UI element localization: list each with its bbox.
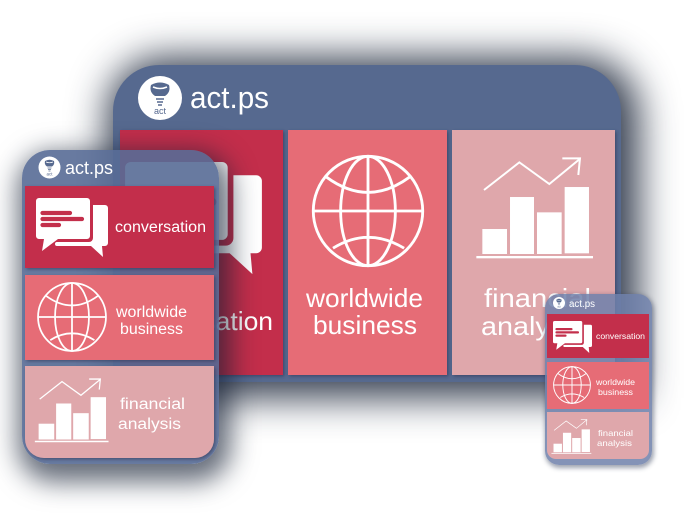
card: financial analysis small — [547, 412, 649, 459]
card: worldwide business small — [547, 362, 649, 409]
logo: large — [138, 76, 269, 120]
card: financial analysis large — [452, 130, 615, 375]
card: worldwide business medium: worldwide — [115, 304, 187, 321]
card: conversation small: conversation — [596, 331, 645, 341]
card: conversation large — [120, 130, 283, 375]
card: financial analysis medium: analysis — [118, 416, 181, 433]
card: conversation medium: conversation — [115, 219, 206, 236]
card: worldwide business large: business — [313, 310, 417, 340]
panel: small phone screen — [545, 294, 652, 465]
logo: small — [553, 297, 595, 310]
card: financial analysis small: financial — [598, 428, 633, 438]
card: worldwide business small: worldwide — [595, 377, 635, 387]
logo: large: act.ps — [190, 80, 269, 115]
card: worldwide business large: worldwide — [305, 283, 423, 313]
logo: medium: act.ps — [65, 158, 113, 178]
card: financial analysis medium — [25, 366, 214, 458]
card: financial analysis large: financial — [484, 283, 591, 313]
card: worldwide business small: business — [598, 387, 633, 397]
panel: medium tablet screen — [22, 150, 219, 464]
card: conversation small — [547, 314, 649, 358]
card: financial analysis medium: financial — [120, 396, 185, 413]
card: conversation medium — [25, 186, 214, 268]
panel: large desktop screen — [113, 65, 621, 382]
card: conversation large: conversation — [123, 306, 273, 336]
logo: small: act.ps — [569, 299, 595, 310]
card: financial analysis large: analysis — [481, 311, 585, 341]
card: worldwide business large — [288, 130, 447, 375]
card: worldwide business medium — [25, 275, 214, 360]
card: worldwide business medium: business — [120, 321, 183, 338]
card: financial analysis small: analysis — [597, 438, 632, 448]
logo: medium — [38, 156, 113, 178]
